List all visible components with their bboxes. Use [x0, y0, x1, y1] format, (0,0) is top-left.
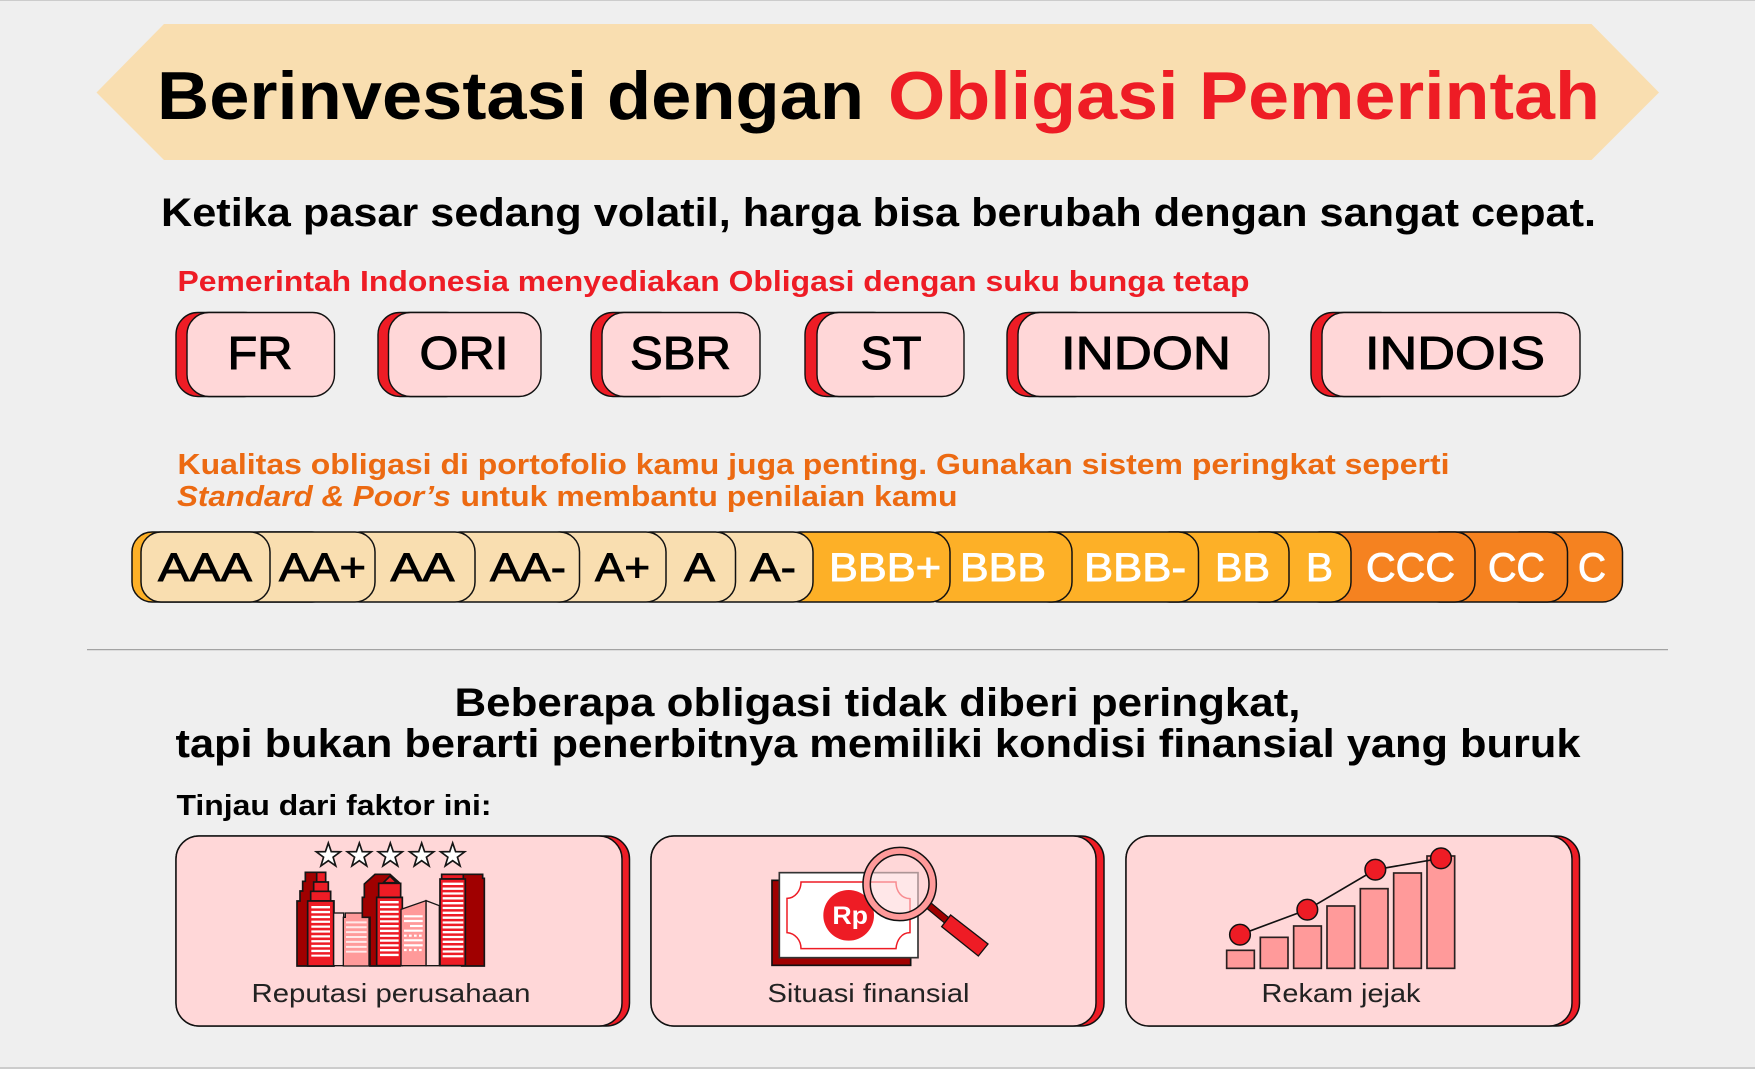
- rating AAA: AAA: [158, 546, 252, 590]
- rating BBB: BBB: [960, 546, 1046, 590]
- card: company reputation: [176, 836, 630, 1026]
- icon: buildings with stars: [297, 843, 484, 966]
- rating AA: [340, 532, 475, 602]
- rating A: [630, 532, 736, 602]
- pill: ORI: [378, 312, 541, 396]
- pill: INDON: [1007, 312, 1269, 396]
- icon: banknote and magnifier: [772, 847, 988, 965]
- label: track record: Rekam jejak: [1262, 978, 1422, 1008]
- rating CCC: CCC: [1366, 546, 1455, 590]
- title banner: Berinvestasi dengan: [157, 58, 864, 134]
- rating scale bar: [132, 532, 1622, 602]
- rating A-: [700, 532, 813, 602]
- rating AA-: AA-: [490, 546, 566, 590]
- rating AA-: [440, 532, 580, 602]
- rating BBB-: [1030, 532, 1198, 602]
- bond type pills: [176, 312, 1580, 396]
- rating BBB-: BBB-: [1084, 546, 1186, 590]
- pill: ORI: ORI: [420, 327, 508, 379]
- rating BB: BB: [1215, 546, 1270, 590]
- rating A: A: [684, 546, 715, 590]
- rating CC: [1420, 532, 1568, 602]
- rating AA+: [240, 532, 375, 602]
- rating BBB: [920, 532, 1072, 602]
- rating C: [1500, 532, 1622, 602]
- pill: INDOIS: [1311, 312, 1580, 396]
- rating BB: [1150, 532, 1289, 602]
- pill: SBR: [591, 312, 760, 396]
- title banner: [96, 24, 1659, 160]
- orange rating text: Standard & Poor’s: [177, 481, 451, 513]
- pill: ST: ST: [860, 327, 922, 379]
- icon: rising bar chart: [1227, 848, 1455, 968]
- section heading: tapi bukan berarti penerbitnya memiliki kondisi finansial yang buruk: [176, 722, 1581, 766]
- rating AAA: [141, 532, 270, 602]
- rating AA+: AA+: [279, 546, 366, 590]
- rating A+: [540, 532, 666, 602]
- pill: SBR: SBR: [630, 327, 731, 379]
- rating B: [1240, 532, 1351, 602]
- rating A-: A-: [750, 546, 796, 590]
- pill: INDON: INDON: [1061, 327, 1231, 379]
- rating CC: CC: [1488, 546, 1545, 590]
- factors label: Tinjau dari faktor ini:: [176, 790, 492, 822]
- rating BBB+: BBB+: [829, 546, 941, 590]
- card: financial situation: [651, 836, 1104, 1026]
- orange rating text: Kualitas obligasi di portofolio kamu juga penting. Gunakan sistem peringkat seperti: [178, 449, 1450, 481]
- rating B: B: [1306, 546, 1333, 590]
- card: track record: [1126, 836, 1580, 1026]
- red intro text: Pemerintah Indonesia menyediakan Obligasi dengan suku bunga tetap: [178, 266, 1250, 298]
- pill: INDOIS: INDOIS: [1365, 327, 1545, 379]
- label: company reputation: Reputasi perusahaan: [252, 978, 530, 1008]
- rating CCC: [1300, 532, 1475, 602]
- section heading: Beberapa obligasi tidak diberi peringkat,: [454, 681, 1300, 725]
- rating C: C: [1578, 546, 1606, 590]
- pill: FR: FR: [228, 327, 292, 379]
- rating BBB+: [780, 532, 950, 602]
- subtitle: Ketika pasar sedang volatil, harga bisa berubah dengan sangat cepat.: [161, 191, 1596, 235]
- icon: banknote and magnifier: Rp: [832, 903, 868, 930]
- label: financial situation: Situasi finansial: [768, 978, 970, 1008]
- rating AA: AA: [390, 546, 455, 590]
- pill: FR: [176, 312, 334, 396]
- orange rating text: [177, 449, 1450, 513]
- pill: ST: [805, 312, 964, 396]
- section heading: [176, 681, 1581, 766]
- rating A+: A+: [595, 546, 650, 590]
- orange rating text: untuk membantu penilaian kamu: [460, 481, 958, 513]
- title banner: Obligasi Pemerintah: [888, 58, 1600, 134]
